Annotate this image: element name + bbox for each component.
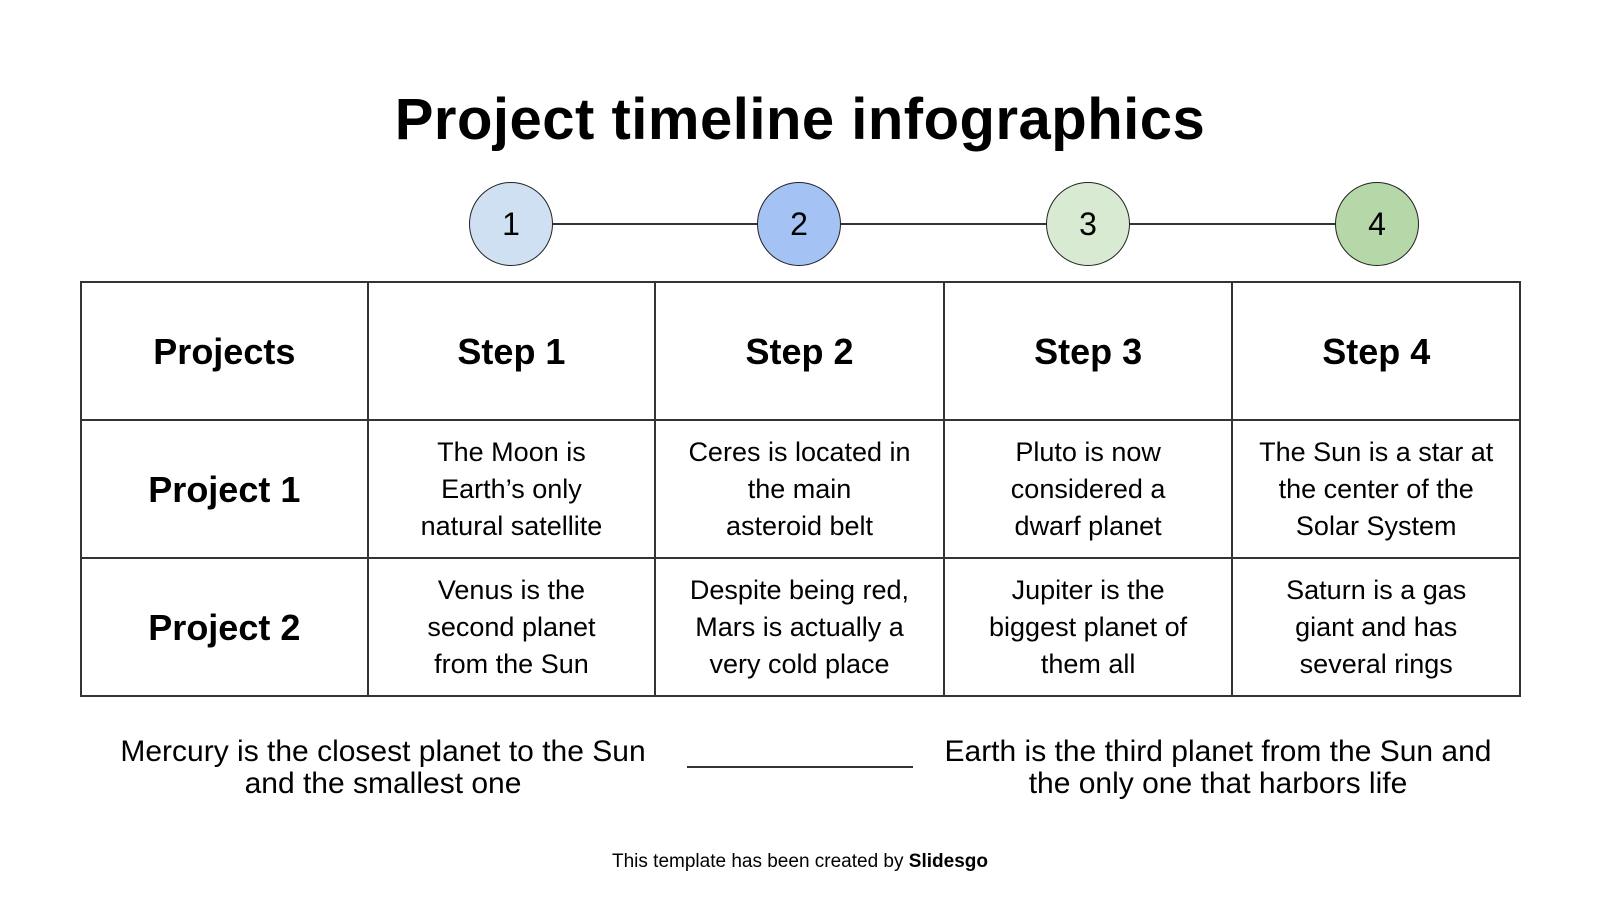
table: several rings xyxy=(1300,648,1453,678)
table: Saturn is a gas xyxy=(1286,574,1466,604)
table: Step 3 xyxy=(1034,330,1142,372)
table: asteroid belt xyxy=(726,510,873,540)
bottom text right xyxy=(944,735,1492,800)
table: from the Sun xyxy=(434,648,589,678)
table: Step 4 xyxy=(1322,330,1430,372)
table: Step 1 xyxy=(457,330,565,372)
table: giant and has xyxy=(1295,612,1457,642)
table: Mars is actually a xyxy=(695,612,904,642)
timeline connector line xyxy=(511,223,1377,225)
table: Pluto is now xyxy=(1015,436,1161,466)
table: Project 1 xyxy=(148,468,300,510)
bottom text left: and the smallest one xyxy=(245,767,521,800)
bottom text left xyxy=(120,735,646,800)
circle 3: 3 xyxy=(1079,206,1097,242)
table: biggest planet of xyxy=(989,612,1187,642)
table: Earth’s only xyxy=(441,474,582,504)
table: very cold place xyxy=(709,648,890,678)
bottom text right: the only one that harbors life xyxy=(1029,767,1407,800)
bottom text left: Mercury is the closest planet to the Sun xyxy=(120,735,646,768)
table: Ceres is located in xyxy=(688,436,911,466)
table: them all xyxy=(1041,648,1135,678)
circle 4 xyxy=(1335,182,1419,266)
circle 2 xyxy=(757,182,841,266)
table xyxy=(80,281,1521,697)
table: Venus is the xyxy=(438,574,585,604)
table: The Sun is a star at xyxy=(1259,436,1493,466)
table: Step 2 xyxy=(745,330,854,372)
table: The Moon is xyxy=(437,436,586,466)
table: Projects xyxy=(153,330,295,372)
table: Solar System xyxy=(1296,510,1456,540)
table: Despite being red, xyxy=(690,574,909,604)
table: second planet xyxy=(427,612,596,642)
table: considered a xyxy=(1011,474,1165,504)
table: the center of the xyxy=(1279,474,1474,504)
table: dwarf planet xyxy=(1015,510,1162,540)
circle 4: 4 xyxy=(1368,206,1386,242)
title: Project timeline infographics xyxy=(395,87,1205,152)
footer credit: This template has been created by Slidesgo xyxy=(612,851,988,872)
table: Project 2 xyxy=(148,606,300,648)
circle 1 xyxy=(469,182,553,266)
table: the main xyxy=(748,474,851,504)
table: Jupiter is the xyxy=(1012,574,1165,604)
bottom divider line xyxy=(687,766,913,768)
bottom text right: Earth is the third planet from the Sun and xyxy=(944,735,1492,768)
circle 1: 1 xyxy=(502,206,520,242)
circle 3 xyxy=(1046,182,1130,266)
table: natural satellite xyxy=(421,510,602,540)
circle 2: 2 xyxy=(790,206,808,242)
